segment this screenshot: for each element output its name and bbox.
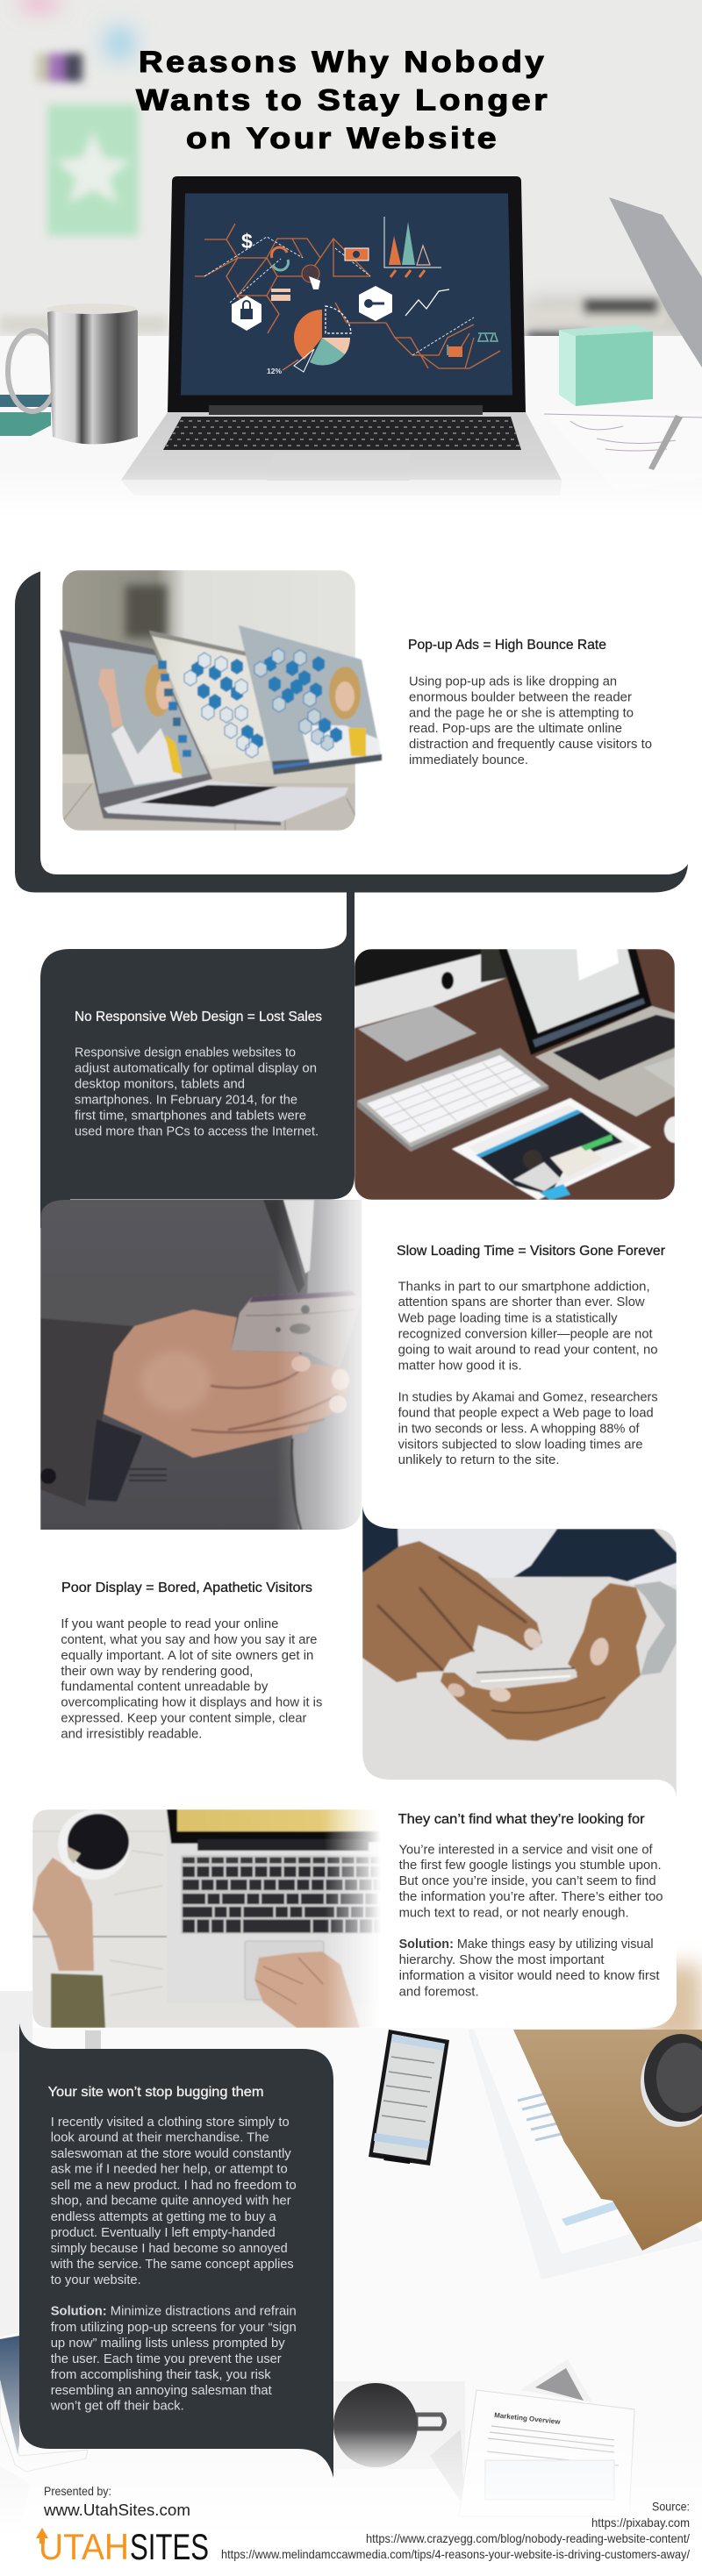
source credits: https://pixabay.com bbox=[591, 2515, 690, 2530]
coffee mug bbox=[333, 2383, 444, 2467]
teal box bbox=[559, 325, 653, 406]
body: slow loading: Web page loading time is a statistically bbox=[398, 1311, 618, 1326]
body: bugging: the user. Each time you prevent the user bbox=[51, 2351, 282, 2366]
laptop screen chart icons: 12% bbox=[267, 367, 282, 375]
side laptop bbox=[609, 197, 702, 367]
body: bugging: with the service. The same concept applies bbox=[50, 2257, 294, 2272]
body: poor display: If you want people to read your online bbox=[61, 1616, 278, 1631]
body: bugging: saleswoman at the store would constantly bbox=[51, 2146, 291, 2161]
panel: pop-up ads frame bbox=[15, 570, 688, 949]
body: bugging: from utilizing pop-up screens for your “sign bbox=[51, 2320, 297, 2335]
photo: man holding phone bbox=[40, 1199, 369, 1531]
text: pop-up ads body: immediately bounce. bbox=[409, 753, 528, 767]
heading: can't find: They can’t find what they’re looking for bbox=[398, 1812, 645, 1827]
source credits bbox=[221, 2500, 690, 2561]
report on tablet bbox=[459, 2390, 634, 2516]
body: can't find bbox=[399, 1842, 663, 1999]
body: can't find: hierarchy. Show the most important bbox=[399, 1952, 605, 1967]
source credits: Source: bbox=[652, 2500, 690, 2514]
text: responsive design body: Responsive design enables websites to bbox=[75, 1045, 296, 1060]
body: bugging: shop, and became quite annoyed with her bbox=[51, 2194, 291, 2209]
body: bugging: I recently visited a clothing store simply to bbox=[51, 2115, 290, 2130]
left tablet bbox=[0, 2052, 88, 2535]
body: bugging: sell me a new product. I had no freedom to bbox=[51, 2178, 297, 2193]
photo: laptop and coffee from above bbox=[32, 1809, 381, 2028]
text: responsive design body: first time, smartphones and tablets were bbox=[75, 1108, 306, 1123]
heading: slow loading: Slow Loading Time = Visitors Gone Forever bbox=[397, 1244, 666, 1259]
presented by block: Presented by: bbox=[44, 2484, 111, 2498]
brown folder bbox=[513, 2030, 702, 2251]
hexagon icons right bbox=[264, 656, 342, 743]
body: poor display: overcomplicating how it displays and how it is bbox=[61, 1695, 323, 1710]
photo: laptop with floating screens bbox=[60, 570, 382, 831]
heading: poor display: Poor Display = Bored, Apathetic Visitors bbox=[61, 1581, 312, 1595]
body: can't find: the first few google listings you stumble upon. bbox=[399, 1858, 662, 1873]
body: slow loading: found that people expect a Web page to load bbox=[398, 1405, 654, 1421]
title: Wants to Stay Longer bbox=[136, 84, 550, 118]
body: slow loading: visitors subjected to slow loading times are bbox=[398, 1437, 643, 1452]
text: responsive design body: desktop monitors, tablets and bbox=[75, 1077, 245, 1091]
heading: bugging: Your site won’t stop bugging them bbox=[48, 2085, 264, 2100]
panel: no responsive design bbox=[40, 921, 355, 1228]
body: poor display: their own way by rendering good, bbox=[61, 1664, 253, 1679]
body: poor display: and irresistibly readable. bbox=[61, 1726, 202, 1741]
body: slow loading: recognized conversion killer—people are not bbox=[398, 1326, 653, 1342]
heading: responsive design: No Responsive Web Design = Lost Sales bbox=[75, 1010, 322, 1024]
text: responsive design body: adjust automatically for optimal display on bbox=[75, 1061, 317, 1075]
title: Reasons Why Nobody bbox=[139, 46, 547, 79]
phone bbox=[369, 2030, 449, 2166]
text: pop-up ads body bbox=[409, 674, 652, 767]
title: on Your Website bbox=[186, 122, 499, 155]
body: slow loading bbox=[398, 1279, 658, 1467]
body: poor display: expressed. Keep your content simple, clear bbox=[61, 1710, 306, 1726]
text: poor display bbox=[61, 1581, 323, 1741]
notebook sketches bbox=[541, 410, 702, 492]
text: responsive design body: smartphones. In February 2014, for the bbox=[75, 1092, 297, 1107]
body: slow loading: in two seconds or less. A whopping 88% of bbox=[398, 1421, 640, 1436]
text: responsive design body: used more than PCs to access the Internet. bbox=[75, 1124, 319, 1138]
laptop screen chart icons bbox=[195, 217, 500, 375]
text: pop-up ads body: Using pop-up ads is like dropping an bbox=[409, 674, 617, 689]
panel: site won't stop bugging them bbox=[19, 2023, 333, 2478]
coffee mug bbox=[8, 303, 138, 444]
body: can't find: the information you’re after. There’s either too bbox=[399, 1889, 663, 1904]
text: slow loading bbox=[397, 1244, 666, 1467]
body: bugging: up now” mailing lists unless prompted by bbox=[51, 2336, 285, 2351]
body: bugging bbox=[50, 2115, 297, 2414]
body: bugging: to your website. bbox=[51, 2273, 141, 2287]
logo: Utah Sites: SITES bbox=[130, 2526, 209, 2567]
body: slow loading: In studies by Akamai and Gomez, researchers bbox=[398, 1390, 658, 1405]
panel: can't find what they're looking for bbox=[32, 1780, 677, 2028]
body: bugging: product. Eventually I left empty-handed bbox=[51, 2225, 276, 2240]
teal cutting mat bbox=[0, 395, 53, 436]
presented by block bbox=[36, 2484, 209, 2567]
hero photo: desk with laptop bbox=[0, 0, 702, 517]
body: bugging: ask me if I needed her help, or attempt to bbox=[51, 2162, 288, 2177]
body: poor display: fundamental content unreadable by bbox=[61, 1680, 269, 1695]
body: bugging: won’t get off their back. bbox=[50, 2399, 184, 2414]
heading: pop-up ads: Pop-up Ads = High Bounce Rate bbox=[408, 638, 606, 653]
papers bbox=[468, 2030, 702, 2280]
laptop bbox=[121, 176, 562, 496]
body: poor display: content, what you say and how you say it are bbox=[61, 1632, 317, 1647]
body: bugging: simply because I had become so annoyed bbox=[51, 2241, 288, 2256]
body: bugging: look around at their merchandise. The bbox=[51, 2130, 269, 2145]
body: poor display bbox=[61, 1616, 323, 1741]
dark cup bbox=[641, 2034, 702, 2127]
report stack bbox=[333, 2359, 592, 2508]
photo: hands using phone bbox=[362, 1500, 677, 1800]
laptop screen chart icons: $ bbox=[241, 230, 253, 253]
text: pop-up ads body: enormous boulder between the reader bbox=[409, 689, 632, 704]
body: can't find: Solution: Make things easy by utilizing visual bbox=[399, 1937, 654, 1952]
hero fade bbox=[0, 469, 702, 517]
body: bugging: from accomplishing their task, you risk bbox=[51, 2367, 271, 2382]
body: slow loading: matter how good it is. bbox=[398, 1358, 522, 1373]
body: can't find: information a visitor would need to know first bbox=[399, 1968, 660, 1983]
logo: Utah Sites: UTAH bbox=[39, 2526, 129, 2567]
text: pop-up ads body: read. Pop-ups are the ultimate online bbox=[409, 721, 622, 736]
body: slow loading: attention spans are shorter than ever. Slow bbox=[398, 1295, 645, 1309]
text: pop-up ads body: distraction and frequently cause visitors to bbox=[409, 737, 652, 752]
text: responsive design body bbox=[75, 1045, 319, 1138]
body: can't find: and foremost. bbox=[399, 1984, 479, 1999]
title bbox=[136, 46, 550, 155]
text: pop-up ads body: and the page he or she is attempting to bbox=[409, 705, 634, 720]
logo: Utah Sites bbox=[36, 2526, 209, 2567]
body: slow loading: Thanks in part to our smartphone addiction, bbox=[398, 1279, 650, 1294]
body: can't find: You’re interested in a service and visit one of bbox=[399, 1842, 653, 1857]
body: slow loading: unlikely to return to the site. bbox=[398, 1452, 560, 1467]
presented by block: www.UtahSites.com bbox=[43, 2501, 190, 2519]
body: poor display: equally important. A lot of site owners get in bbox=[61, 1648, 313, 1663]
report on tablet: Marketing Overview bbox=[494, 2411, 562, 2426]
body: slow loading: going to wait around to read your content, no bbox=[398, 1342, 658, 1357]
background photo: white desk with stationery bbox=[0, 1965, 702, 2576]
body: bugging: endless attempts at getting me to buy a bbox=[51, 2209, 276, 2224]
body: bugging: resembling an annoying salesman that bbox=[51, 2383, 272, 2398]
fade bbox=[0, 2430, 702, 2535]
body: bugging: Solution: Minimize distractions and refrain bbox=[51, 2304, 297, 2319]
body: can't find: much text to read, or not nearly enough. bbox=[399, 1905, 629, 1920]
photo: desk with iMac, laptop, keyboard and tablet bbox=[355, 949, 685, 1200]
hexagon icons left bbox=[191, 659, 263, 749]
body: can't find: But once you’re inside, you can’t seem to find bbox=[399, 1873, 656, 1888]
